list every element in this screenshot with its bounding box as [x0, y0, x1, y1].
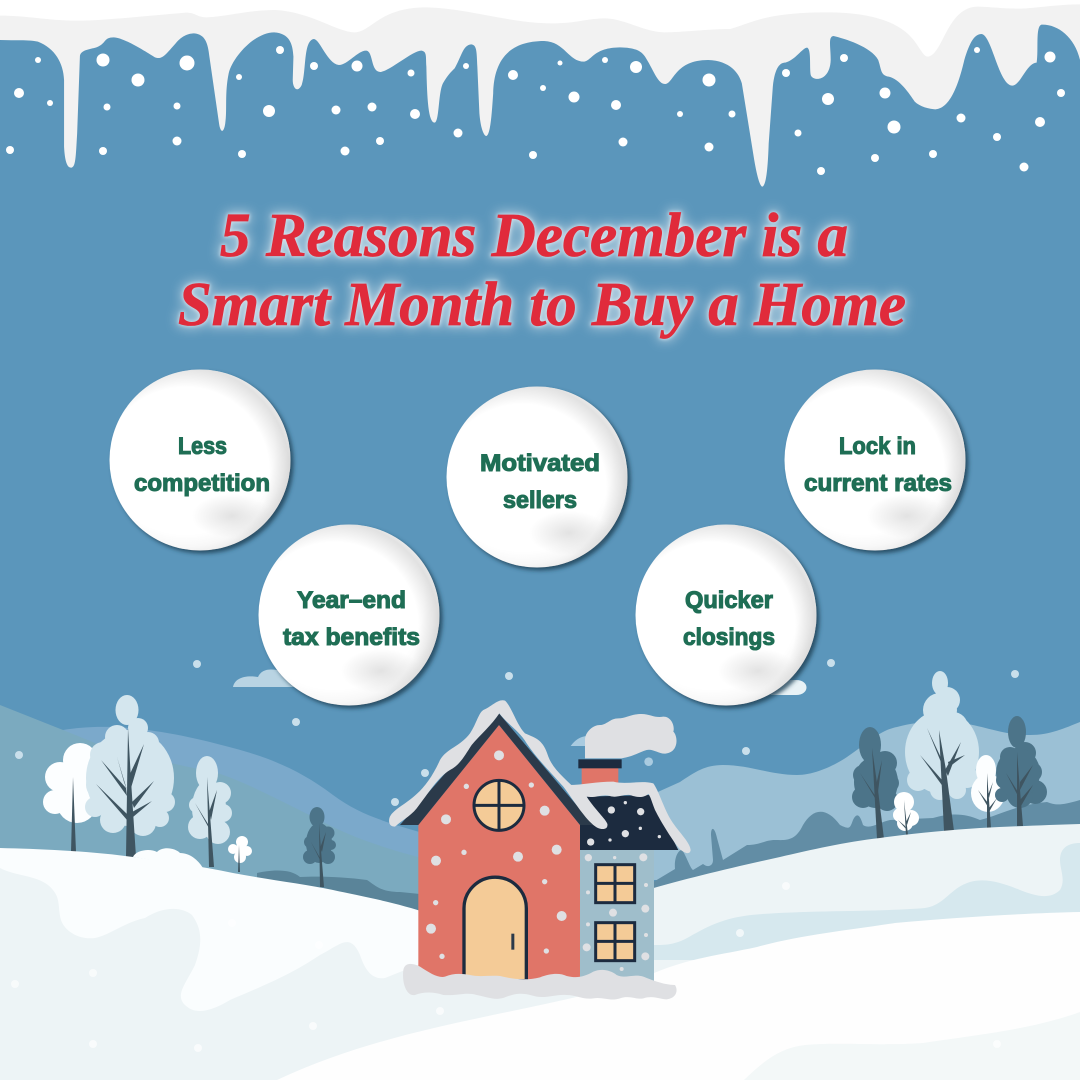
right wing wall	[580, 849, 654, 981]
snowy ground right	[640, 824, 1080, 1000]
snow drift at base	[403, 964, 677, 1000]
title: 5 Reasons December is a	[220, 202, 848, 270]
bubble: Less competition: competition	[134, 470, 270, 497]
bubble: Motivated sellers	[446, 386, 628, 568]
sky snow dots, lower	[15, 659, 1019, 806]
title: 5 Reasons December is a	[220, 202, 848, 270]
back hill, left	[0, 705, 430, 920]
wall snow dots	[426, 750, 661, 971]
bubble: Quicker closings	[636, 524, 816, 706]
shaded snow left	[0, 868, 700, 1080]
tree: small white right	[893, 792, 919, 835]
title: Smart Month to Buy a Home	[178, 271, 906, 339]
tree: white right	[971, 755, 1005, 828]
dark ridge, right	[650, 800, 1080, 900]
smoke	[571, 714, 677, 766]
snow band on top	[0, 4, 1080, 200]
bubble: Less competition: Less	[178, 433, 227, 460]
bubble: Lock in current rates: Lock in	[839, 433, 916, 460]
tree: small white left	[228, 836, 252, 872]
round window	[474, 780, 524, 830]
main roof	[400, 713, 593, 825]
cloud left	[233, 669, 320, 687]
snow bush	[133, 848, 203, 868]
door	[464, 877, 526, 981]
back hill, far left	[63, 727, 430, 900]
white foreground hill	[277, 912, 1080, 1080]
dark ridge, left	[257, 870, 430, 930]
ground snow dots	[11, 882, 1001, 1052]
tree: pale middle left	[188, 756, 232, 867]
white sky edge	[0, 0, 1080, 200]
bubble: Year-end tax benefits: Year–end	[297, 587, 406, 614]
snowy ground left	[0, 848, 640, 1080]
house	[389, 700, 691, 1000]
shaded snow bottom right	[744, 1012, 1080, 1080]
tree: dark left	[303, 807, 336, 887]
tree: dark right	[852, 727, 899, 839]
lower window	[596, 923, 635, 961]
falling snow dots, top	[6, 46, 1065, 175]
tree: dark far right	[995, 716, 1047, 826]
title	[178, 202, 906, 339]
tree: white left	[43, 743, 97, 852]
title: 5 Reasons December is a	[220, 202, 848, 270]
bubble: Quicker closings: closings	[683, 624, 775, 651]
main roof snow	[389, 700, 607, 829]
bubble: Less competition	[110, 370, 290, 550]
tree: large pale right	[905, 671, 979, 831]
right wing roof	[580, 795, 678, 850]
cloud right	[770, 680, 806, 695]
chimney	[578, 759, 622, 786]
bubble: Motivated sellers: sellers	[503, 487, 577, 514]
right roof snow	[568, 782, 691, 853]
bubble: Year-end tax benefits	[258, 524, 440, 706]
back hill, right	[640, 722, 1080, 880]
bubble: Quicker closings: Quicker	[685, 587, 773, 614]
title: Smart Month to Buy a Home	[178, 271, 906, 339]
shaded snow band right	[640, 843, 1080, 1000]
bubble: Lock in current rates	[784, 370, 966, 550]
upper window	[596, 865, 635, 903]
bubble: Motivated sellers: Motivated	[480, 450, 600, 477]
tree: large pale left	[85, 695, 175, 857]
main wall	[418, 725, 580, 980]
title: Smart Month to Buy a Home	[178, 271, 906, 339]
bubble: Lock in current rates: current rates	[804, 470, 952, 497]
bubble: Year-end tax benefits: tax benefits	[283, 624, 420, 651]
